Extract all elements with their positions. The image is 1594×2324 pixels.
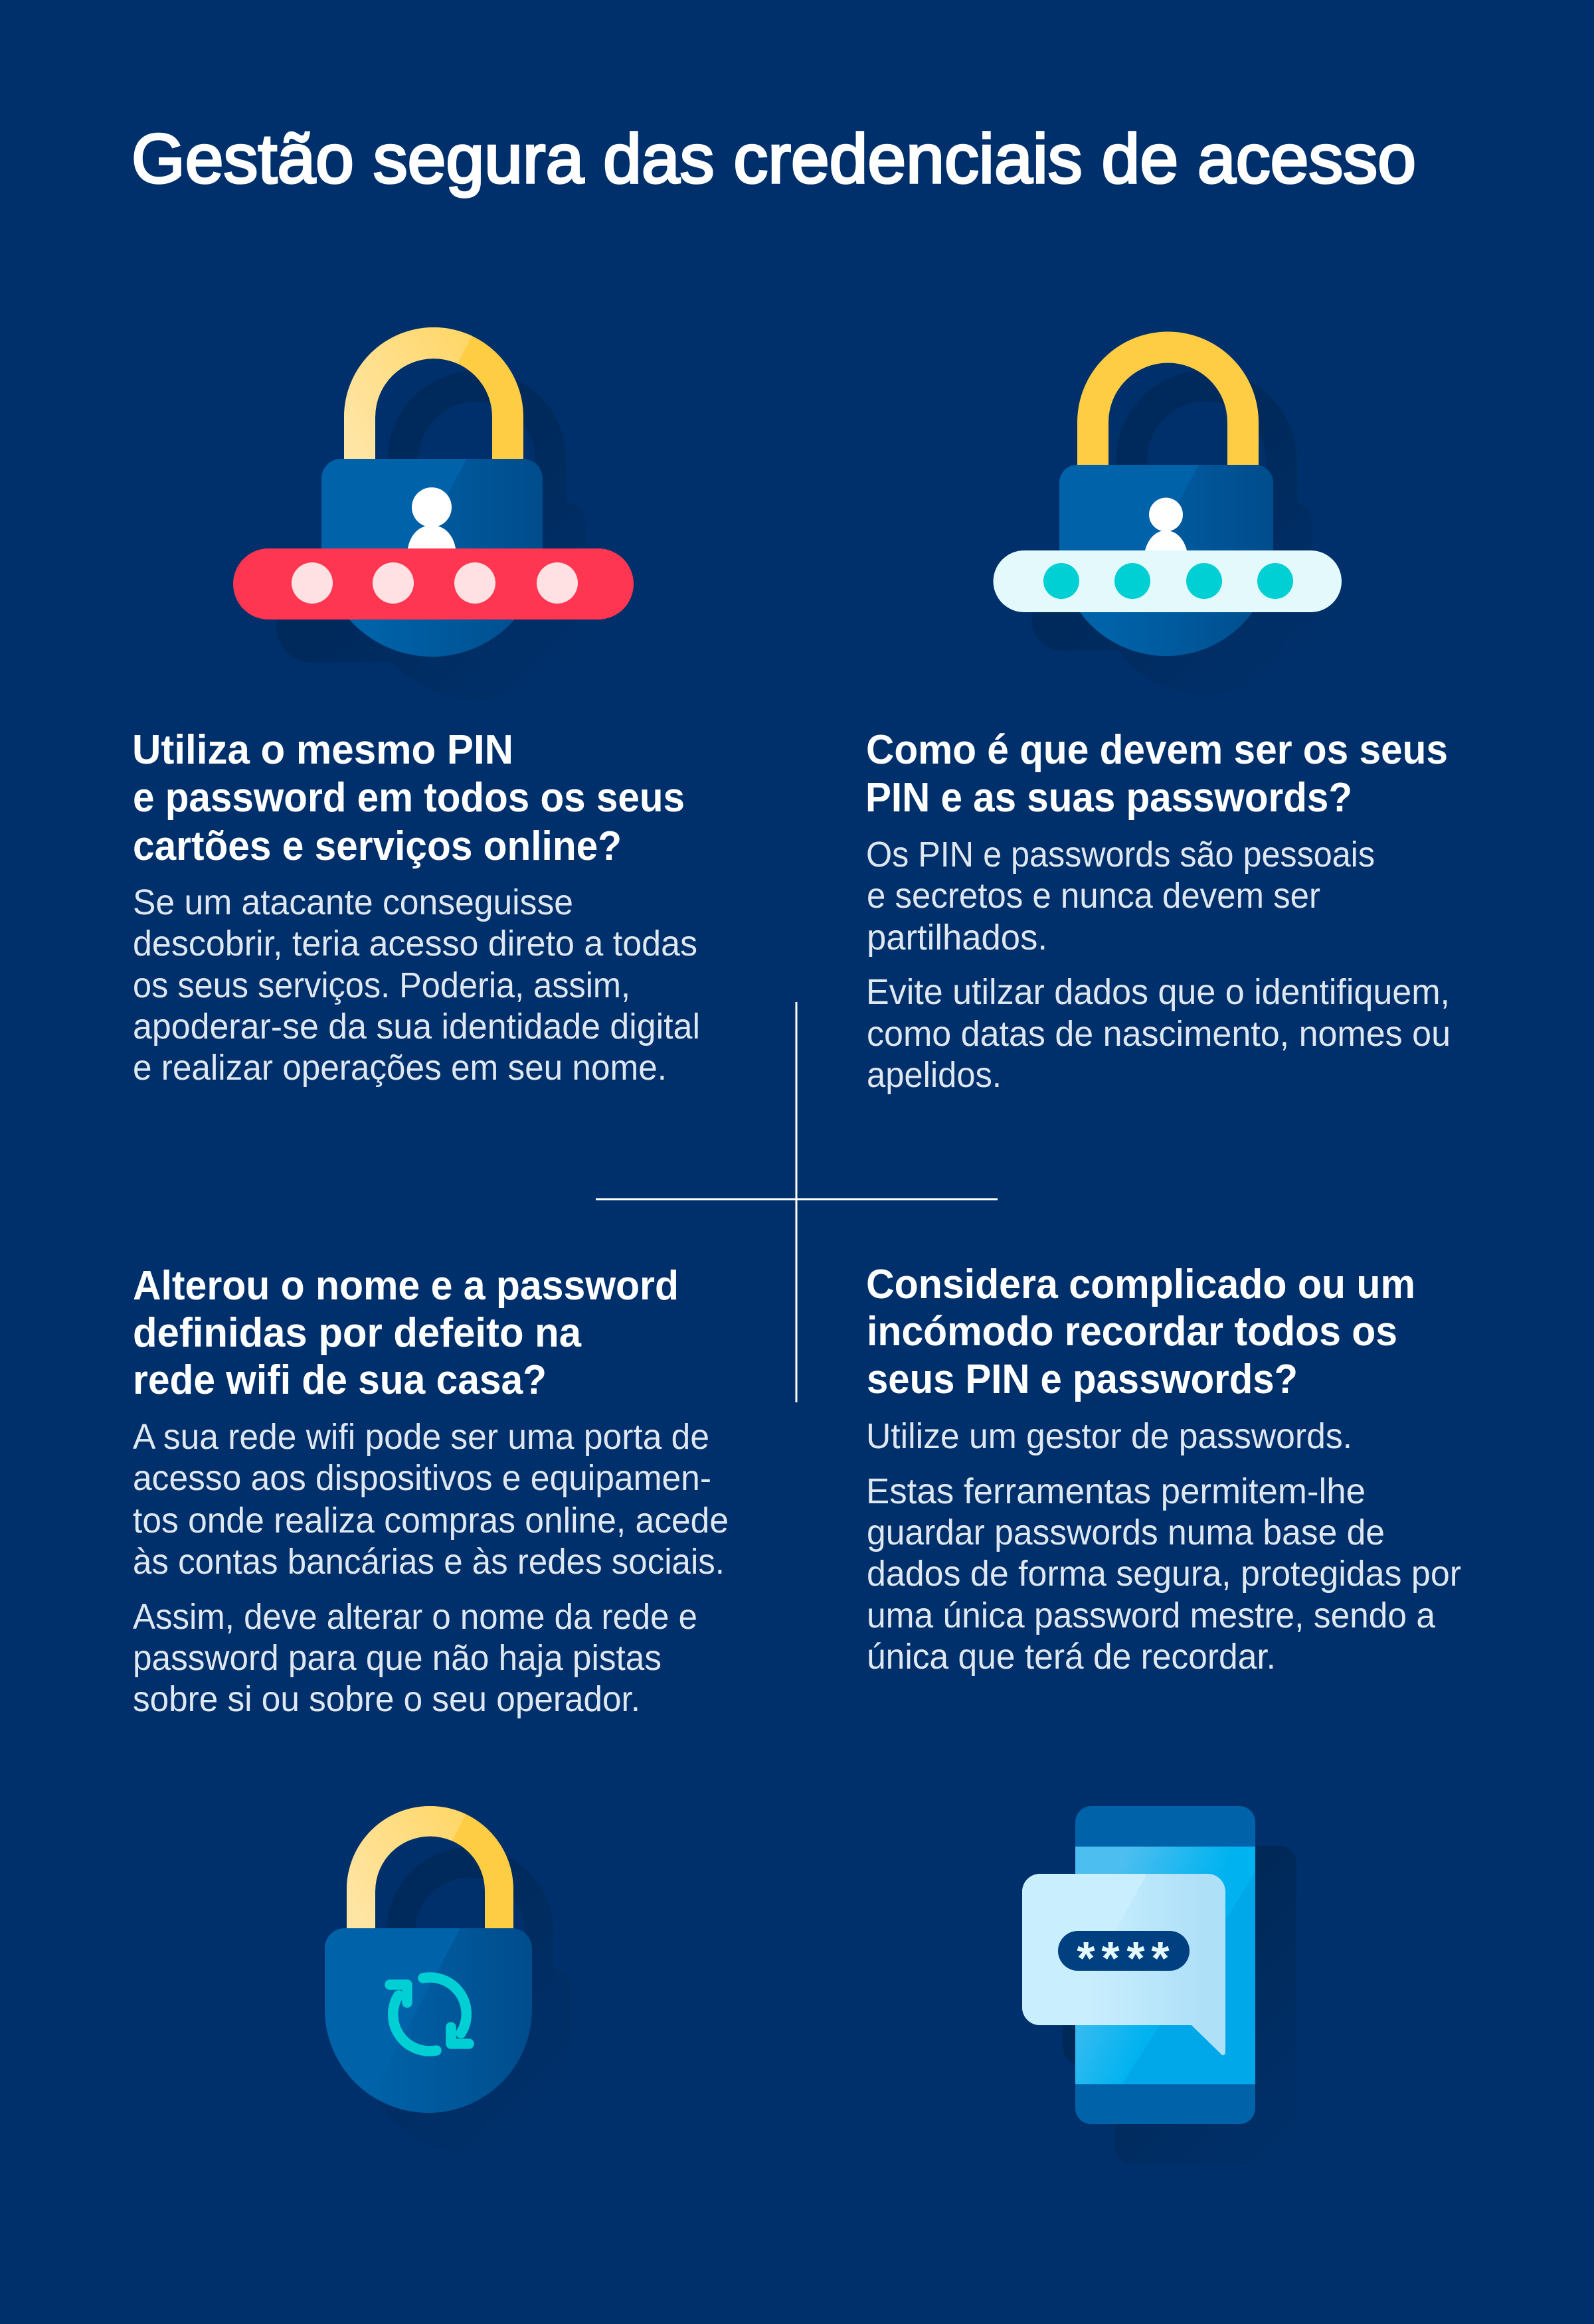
shackle xyxy=(347,1806,513,1928)
shadow of smartphone xyxy=(1063,1846,1296,2164)
text block: password manager question xyxy=(866,1262,1461,1677)
body text: e realizar operações em seu nome. xyxy=(133,1048,667,1088)
body text: às contas bancárias e às redes sociais. xyxy=(133,1542,725,1582)
body text: tos onde realiza compras online, acede xyxy=(133,1501,729,1540)
user silhouette xyxy=(1145,498,1187,550)
body text: apelidos. xyxy=(867,1055,1002,1095)
speech bubble xyxy=(1019,1872,1229,2058)
red PIN bar xyxy=(233,548,634,620)
body text: A sua rede wifi pode ser uma porta de xyxy=(133,1417,709,1457)
heading: Considera complicado ou um xyxy=(866,1262,1415,1307)
heading xyxy=(132,727,685,869)
shadow of red padlock xyxy=(276,371,677,700)
text block: home wifi question xyxy=(133,1263,729,1719)
password field: **** xyxy=(1077,1932,1170,1984)
body text: e secretos e nunca devem ser xyxy=(867,876,1320,916)
body text: Estas ferramentas permitem-lhe xyxy=(866,1471,1366,1511)
icon: padlock with refresh arrows xyxy=(325,1806,553,2113)
shadow of teal padlock xyxy=(1031,371,1380,695)
heading xyxy=(866,1262,1415,1402)
body text: guardar passwords numa base de xyxy=(867,1513,1385,1552)
body text: dados de forma segura, protegidas por xyxy=(867,1554,1461,1594)
PIN dots xyxy=(292,562,578,604)
cross divider xyxy=(596,1002,998,1402)
body text: partilhados. xyxy=(867,918,1047,957)
text block: same PIN question xyxy=(132,727,700,1088)
heading xyxy=(133,1263,679,1403)
heading: PIN e as suas passwords? xyxy=(865,775,1352,821)
icon: teal padlock with PIN bar xyxy=(994,332,1342,676)
heading: seus PIN e passwords? xyxy=(867,1357,1298,1402)
heading: Alterou o nome e a password xyxy=(133,1263,679,1309)
body text xyxy=(133,882,700,1088)
icon: red padlock with PIN bar xyxy=(233,327,634,679)
body text xyxy=(866,1416,1461,1677)
heading: definidas por defeito na xyxy=(133,1310,581,1356)
infographic canvas xyxy=(133,131,1461,2164)
user silhouette xyxy=(408,487,456,548)
body text: Evite utilzar dados que o identifiquem, xyxy=(866,972,1450,1012)
phone screen xyxy=(1075,1847,1255,2084)
body text: acesso aos dispositivos e equipamen- xyxy=(133,1458,711,1498)
body text: Os PIN e passwords são pessoais xyxy=(866,835,1375,874)
lock body xyxy=(1056,465,1275,657)
password field xyxy=(1058,1931,1190,1984)
shackle xyxy=(1077,332,1259,465)
body text: password para que não haja pistas xyxy=(133,1638,662,1678)
body text xyxy=(133,1417,729,1719)
lock body xyxy=(319,459,545,658)
body text: apoderar-se da sua identidade digital xyxy=(133,1007,700,1046)
PIN dots xyxy=(1043,563,1293,599)
shadow of refresh padlock xyxy=(365,1847,572,2153)
title: Gestão segura das credenciais de acesso xyxy=(132,120,1416,198)
heading: incómodo recordar todos os xyxy=(867,1309,1397,1355)
heading: cartões e serviços online? xyxy=(133,823,622,869)
body text: uma única password mestre, sendo a xyxy=(867,1596,1436,1635)
body text: descobrir, teria acesso direto a todas xyxy=(133,924,697,963)
lock body xyxy=(322,1926,535,2115)
body text xyxy=(866,835,1451,1095)
body text: Assim, deve alterar o nome da rede e xyxy=(133,1597,697,1637)
body text: os seus serviços. Poderia, assim, xyxy=(133,965,630,1005)
heading xyxy=(865,727,1448,821)
phone body xyxy=(1075,1806,1255,2124)
heading: e password em todos os seus xyxy=(133,775,685,821)
body text: como datas de nascimento, nomes ou xyxy=(867,1014,1451,1054)
refresh arrows xyxy=(390,1977,469,2051)
body text: Utilize um gestor de passwords. xyxy=(866,1416,1352,1456)
shackle xyxy=(344,327,523,459)
pale PIN bar xyxy=(994,550,1342,612)
body text: única que terá de recordar. xyxy=(867,1637,1276,1677)
heading: rede wifi de sua casa? xyxy=(133,1357,547,1403)
heading: Como é que devem ser os seus xyxy=(866,727,1448,773)
icon: smartphone with password bubble xyxy=(1019,1806,1296,2164)
text block: what PINs should be like xyxy=(865,727,1451,1095)
body text: Se um atacante conseguisse xyxy=(133,882,573,922)
heading: Utiliza o mesmo PIN xyxy=(132,727,513,773)
body text: sobre si ou sobre o seu operador. xyxy=(133,1679,640,1719)
